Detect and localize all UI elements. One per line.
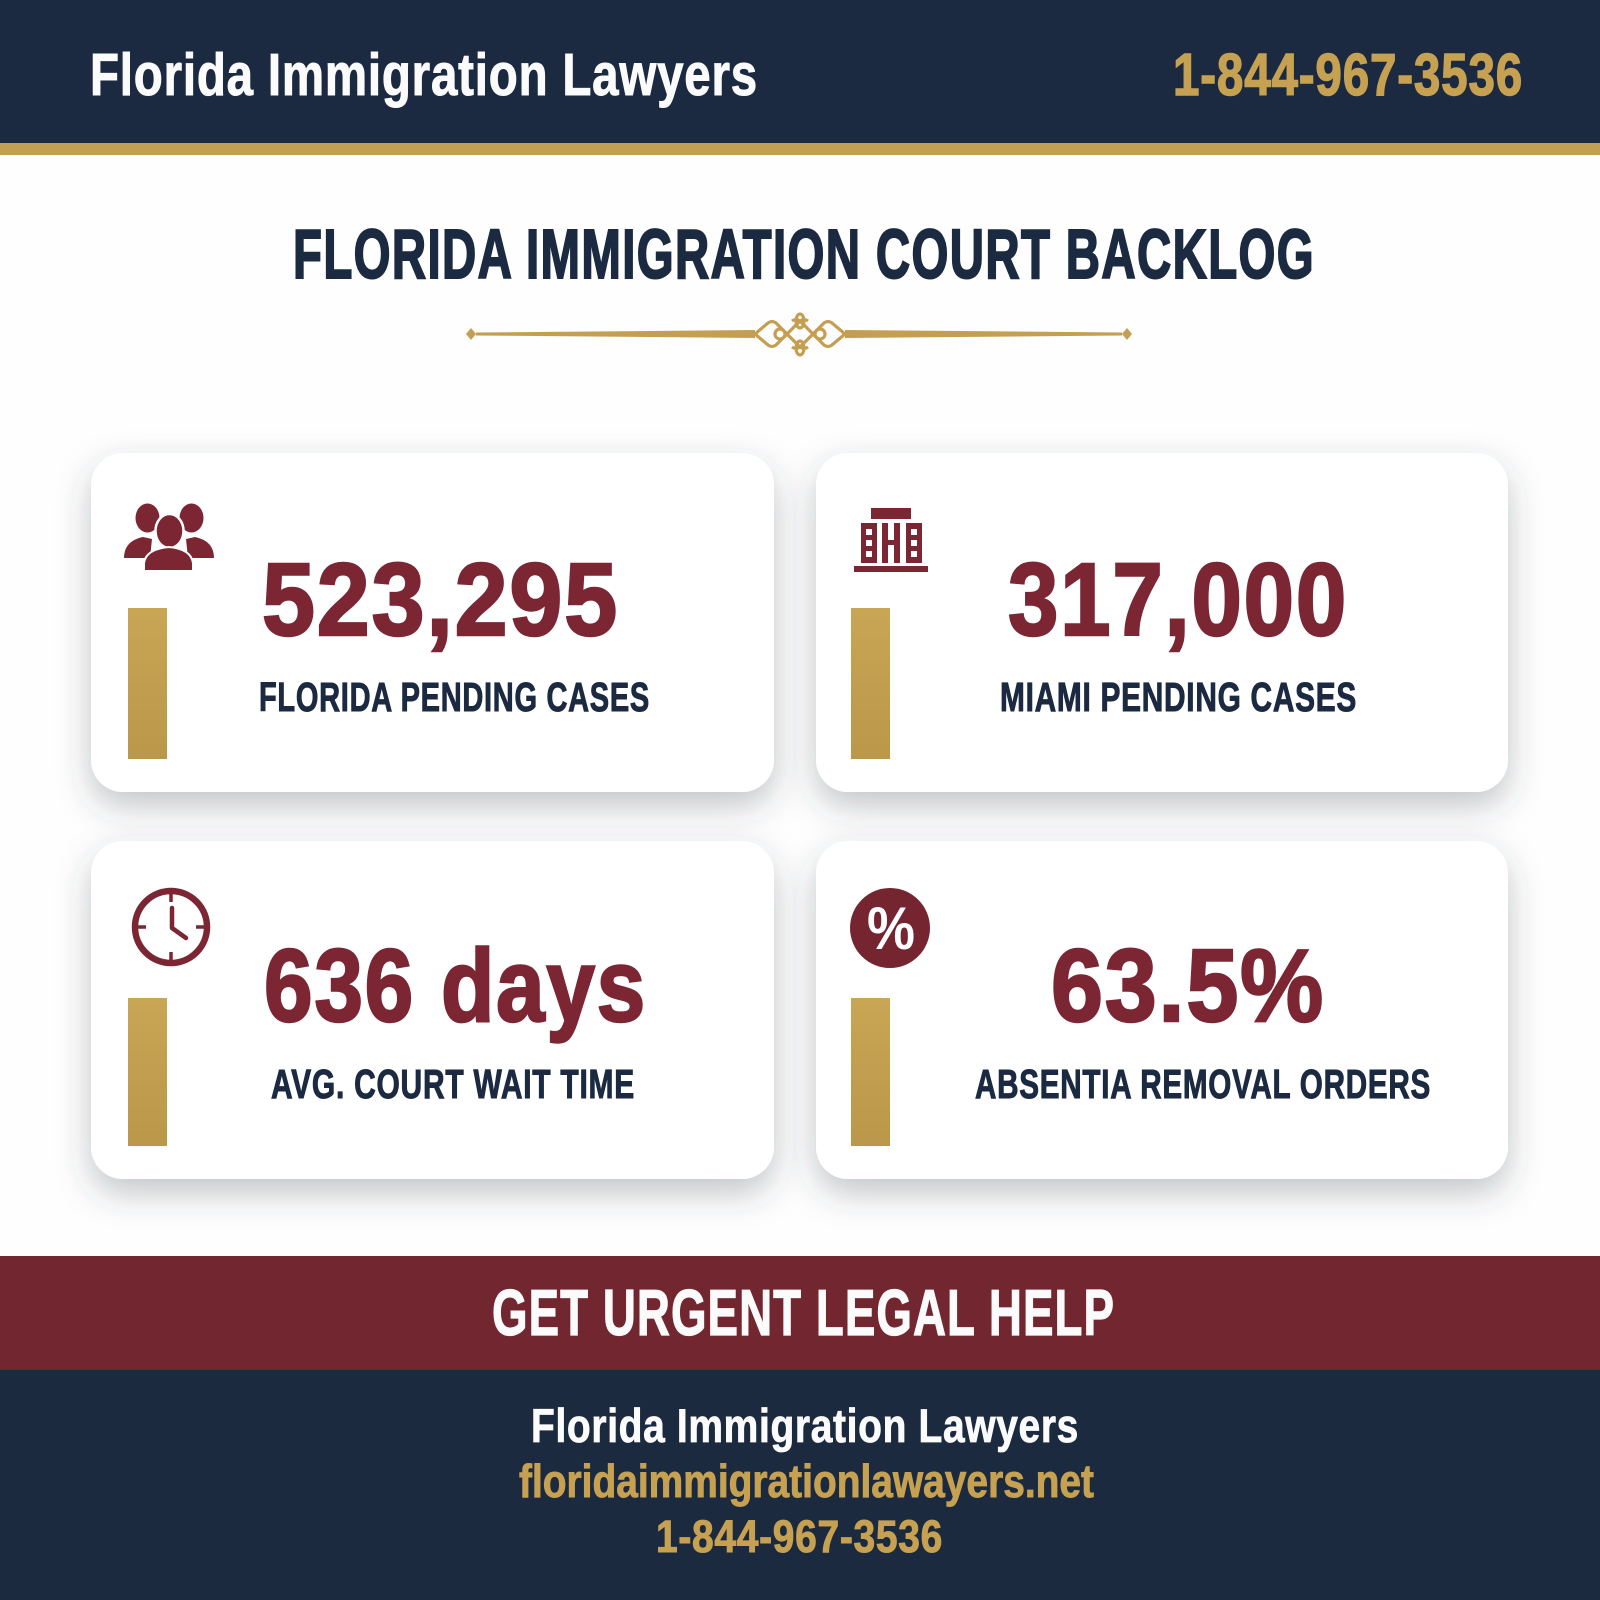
panel: absentia removal orders [816,841,1508,1179]
icon: percent badge [850,888,930,968]
gold bar [128,608,167,759]
header phone number: 1-844-967-3536 [1173,42,1523,108]
label: FLORIDA PENDING CASES [259,674,650,720]
panel: Florida pending cases [91,453,774,792]
footer website: floridaimmigrationlawayers.net [519,1455,1094,1507]
ornamental divider [466,314,1132,355]
panel: average court wait time [91,841,774,1179]
gold bar [851,608,890,759]
label: MIAMI PENDING CASES [1000,674,1357,720]
gold bar [851,998,890,1146]
call to action band [0,1256,1600,1370]
label: AVG. COURT WAIT TIME [271,1061,635,1107]
value: 317,000 [1008,542,1348,657]
footer band [0,1370,1600,1600]
footer phone number: 1-844-967-3536 [656,1511,943,1562]
call to action text: GET URGENT LEGAL HELP [492,1276,1115,1349]
icon: clock [135,891,207,963]
icon: courthouse building [854,508,928,572]
value: 636 days [264,928,647,1043]
gold bar [128,998,167,1146]
value: 63.5% [1051,928,1325,1043]
header firm name: Florida Immigration Lawyers [90,42,758,108]
icon: people group [124,504,214,571]
label: ABSENTIA REMOVAL ORDERS [975,1061,1431,1107]
icon: percent badge: % [867,895,915,962]
value: 523,295 [262,542,619,657]
panel: Miami pending cases [816,453,1508,792]
footer firm name: Florida Immigration Lawyers [531,1399,1079,1452]
header band [0,0,1600,155]
